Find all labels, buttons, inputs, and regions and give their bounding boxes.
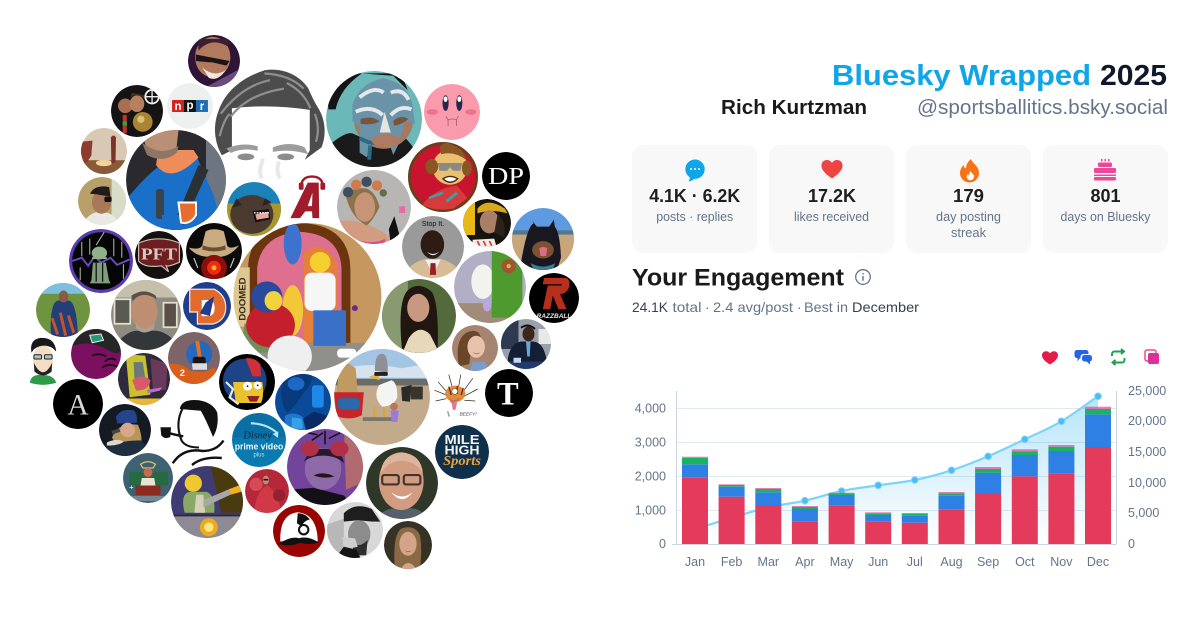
avatar: The Athletic A logo [53, 379, 103, 429]
engagement summary line: 2.4 avg/post [713, 299, 793, 315]
pink quote bars [682, 407, 1111, 514]
avatar: Mile High Sports logo: HIGH [444, 443, 480, 458]
right axis labels [1128, 384, 1166, 551]
month labels: Mar [758, 555, 779, 569]
avatar: MF DOOM mask painting [326, 71, 422, 167]
title: 2025 [1100, 60, 1167, 92]
engagement summary line [632, 299, 919, 315]
avatar: man with backpack in hedge [36, 283, 90, 337]
avatar: man in black cap [78, 177, 126, 225]
avatar: black and white Lemmy portrait [327, 502, 383, 558]
left axis labels: 2,000 [635, 470, 666, 484]
avatar: PFT metal badge [135, 231, 183, 279]
icon: birthday cake [1094, 159, 1116, 180]
avatar: NPR logo: n [175, 101, 182, 113]
stat label: days on Bluesky [1060, 209, 1151, 224]
line markers [802, 393, 1101, 504]
icon: likes legend heart [1042, 351, 1058, 364]
avatar: red blurred figure in sunglasses [245, 469, 289, 513]
month labels: May [830, 555, 854, 569]
right axis labels: 15,000 [1128, 445, 1166, 459]
avatar: green pirate hat mascot [123, 453, 173, 503]
month labels: Jul [907, 555, 923, 569]
avatar: blue-lit selfie [275, 374, 331, 430]
avatar: two men with gold trophy [111, 85, 163, 137]
green repost bars [682, 409, 1111, 516]
avatar: cartoon monkey in Hawaiian shirt [409, 143, 477, 211]
left axis labels: 4,000 [635, 402, 666, 416]
icon: heart [821, 160, 843, 178]
right axis labels: 20,000 [1128, 414, 1166, 428]
avatar: Mile High Sports logo [435, 425, 489, 479]
avatar: Disney prime video plus logo [232, 413, 286, 467]
avatar: Disney prime video plus logo: prime video [235, 441, 284, 451]
avatar: startled spiky-haired cat sketch: BEEFY! [459, 411, 477, 417]
right axis labels: 10,000 [1128, 476, 1166, 490]
left axis labels: 3,000 [635, 436, 666, 450]
right axis labels: 5,000 [1128, 506, 1159, 520]
title: Bluesky Wrapped [832, 60, 1091, 92]
right axis labels: 25,000 [1128, 384, 1166, 398]
avatar: Razzball R logo: RAZZBALL [537, 313, 571, 320]
engagement summary line: · [797, 299, 802, 315]
avatar: gray-bearded man by window [111, 280, 181, 350]
panel: posts and replies stat [632, 145, 757, 253]
stat value: 17.2K [808, 185, 857, 206]
panel: days on Bluesky stat [1043, 145, 1168, 253]
avatar: NPR logo: p [186, 100, 194, 112]
stat label: day posting [936, 209, 1001, 224]
avatar: Jordan suit with Stop It text: Stop It. [422, 219, 444, 228]
avatar: Natty Boh mustache mascot [273, 505, 325, 557]
stat value: 801 [1090, 185, 1120, 206]
avatar: woman in blue beanie at microphone [99, 404, 151, 456]
avatar: New York Times T logo: T [497, 377, 519, 413]
avatar: Denver Post DP logo: DP [488, 164, 524, 190]
stat value: 4.1K · 6.2K [649, 185, 741, 206]
chart legend icons [1042, 349, 1159, 365]
panel: posting streak stat [906, 145, 1031, 253]
month labels: Nov [1050, 555, 1073, 569]
avatar: Disney prime video plus logo: Disney [242, 431, 272, 442]
avatar: PFT metal badge: PFT [141, 244, 177, 263]
avatar: Denver Post DP logo [482, 152, 530, 200]
avatar: Broncos player with helmet [168, 332, 220, 384]
avatar: green pirate hat mascot: + [129, 482, 134, 491]
avatar: NPR logo: r [200, 101, 205, 113]
user name: Rich Kurtzman [721, 96, 867, 119]
avatar: woman with long hair [384, 521, 432, 569]
stat value: 179 [953, 185, 984, 206]
engagement summary line: Best in [804, 299, 848, 315]
blue reply bars [682, 414, 1111, 523]
avatar: man in yellow cap [463, 199, 511, 247]
avatar: Disney prime video plus logo: plus [254, 453, 264, 459]
heading: Your Engagement: Your Engagement [632, 264, 844, 292]
avatar: pipe-smoking man sketch [160, 400, 224, 465]
cumulative area [695, 396, 1098, 544]
avatar: cartoon man with glasses and green collar [30, 338, 56, 385]
engagement summary line: 24.1K [632, 299, 669, 315]
avatar: TV anchor in dark suit [501, 319, 551, 369]
engagement summary line: December [852, 299, 919, 315]
month labels: Jan [685, 555, 705, 569]
avatar: long-haired woman in garden [382, 279, 456, 353]
stacked bar and cumulative line chart [635, 384, 1166, 569]
avatar: purple-lit man with mustache and antlers [287, 429, 363, 505]
engagement summary line: total [672, 299, 702, 315]
avatar: Simpsons-style yellow face in Giants helmet [219, 354, 275, 410]
avatar: dog on the beach [512, 208, 574, 270]
icon: replies legend bubbles [1074, 350, 1092, 364]
panel: likes stat [769, 145, 894, 253]
avatar: New York Times T logo [485, 369, 533, 417]
stat label: likes received [794, 209, 869, 224]
avatar: giant seagull on beach with fries [334, 349, 430, 445]
avatar: Mile High Sports logo: Sports [443, 453, 481, 468]
avatar: snarling bear [227, 182, 281, 236]
left axis labels [635, 402, 666, 551]
avatar: cowboy hat over red HAL eye [186, 223, 242, 281]
avatar: purple character in black hat [71, 329, 121, 379]
avatar: Simpsons Skinner with blaster [171, 466, 243, 538]
month labels [685, 555, 1109, 569]
avatar: pink Kirby face [424, 84, 480, 140]
icon: flame [960, 159, 979, 182]
avatar: man in blue shirt with seatbelt [126, 130, 226, 230]
month labels: Sep [977, 555, 999, 569]
icon: reposts legend arrows [1112, 349, 1124, 365]
avatar: smiling woman with brown hair [452, 325, 498, 371]
red like bars [682, 447, 1111, 544]
avatar: sunset silhouette [81, 128, 127, 174]
engagement summary line: · [705, 299, 710, 315]
month labels: Aug [940, 555, 963, 569]
avatar: Simpsons family at door [234, 223, 382, 377]
left axis labels: 0 [659, 537, 666, 551]
cumulative line [695, 396, 1098, 528]
icon: quotes legend squares [1145, 350, 1159, 364]
icon: speech bubble [685, 160, 705, 181]
avatar: startled spiky-haired cat sketch [434, 375, 478, 417]
avatar: NPR logo [167, 83, 213, 129]
panel: avatar bubble cluster [30, 35, 579, 569]
avatar: purple ring sound wave figure [69, 229, 133, 293]
avatar: smiling bald man with glasses [366, 447, 438, 519]
left axis labels: 1,000 [635, 504, 666, 518]
month labels: Apr [795, 555, 815, 569]
month labels: Feb [721, 555, 742, 569]
stat label: posts · replies [656, 209, 734, 224]
avatar: colourful magazine cover [118, 353, 170, 405]
month labels: Dec [1087, 555, 1109, 569]
icon: info [856, 270, 870, 284]
avatar: Broncos D logo [183, 282, 231, 330]
avatar: Broncos player with helmet: 2 [180, 368, 185, 378]
right axis labels: 0 [1128, 537, 1135, 551]
avatar: smiling man with glasses [188, 35, 240, 87]
month labels: Oct [1015, 555, 1035, 569]
avatar: sketch portrait with swept hair [215, 70, 325, 178]
month labels: Jun [868, 555, 888, 569]
avatar: Simpsons family at door: DOOMED [237, 277, 248, 321]
avatar: Jordan suit with Stop It text [402, 216, 464, 278]
stat label: streak [951, 225, 986, 240]
avatar: green door with radiation sign [454, 251, 526, 323]
user handle: @sportsballitics.bsky.social [917, 96, 1168, 119]
avatar: The Athletic A logo: A [67, 390, 89, 422]
stat label [936, 209, 1001, 240]
avatar: woman with flower crown [337, 170, 411, 244]
avatar: Razzball R logo [529, 273, 579, 323]
avatar: red A with headset logo [290, 177, 325, 218]
avatar: Mile High Sports logo: MILE [444, 432, 480, 447]
